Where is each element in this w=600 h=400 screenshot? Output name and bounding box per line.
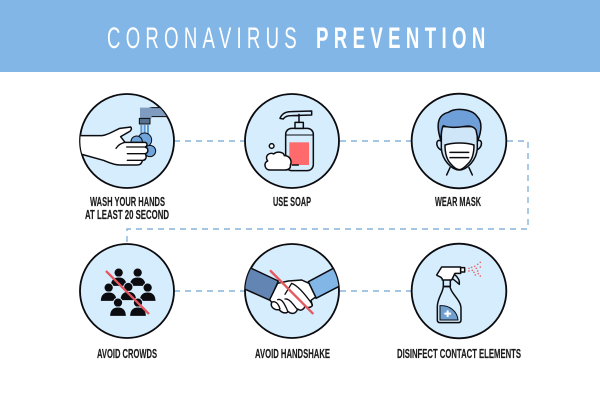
- label: AVOID CROWDS: [97, 347, 157, 361]
- label: DISINFECT CONTACT ELEMENTS: [397, 347, 521, 361]
- panel: avoid crowds: [80, 244, 174, 361]
- header band: [0, 0, 600, 72]
- icon: soap bottle: [245, 94, 339, 188]
- label: AT LEAST 20 SECOND: [85, 208, 169, 222]
- panel: wear mask: [412, 94, 506, 209]
- panel: use soap: [245, 94, 339, 209]
- dashed connector path: [127, 141, 528, 291]
- panel: avoid handshake: [242, 244, 342, 361]
- panel: disinfect: [397, 244, 521, 361]
- label: AVOID HANDSHAKE: [255, 347, 330, 361]
- title: PREVENTION: [316, 22, 485, 55]
- icon: crossed handshake: [242, 244, 342, 338]
- title: CORONAVIRUS: [107, 22, 297, 55]
- icon: hand washing: [78, 94, 177, 188]
- panel: wash hands: [78, 94, 177, 222]
- label: WASH YOUR HANDS: [90, 195, 165, 209]
- title: [107, 22, 485, 55]
- icon: face with mask: [412, 94, 506, 188]
- label: WEAR MASK: [435, 195, 481, 209]
- label: USE SOAP: [273, 195, 311, 209]
- icon: crossed crowd: [80, 244, 174, 338]
- icon: spray bottle: [412, 244, 506, 338]
- label: [85, 195, 169, 222]
